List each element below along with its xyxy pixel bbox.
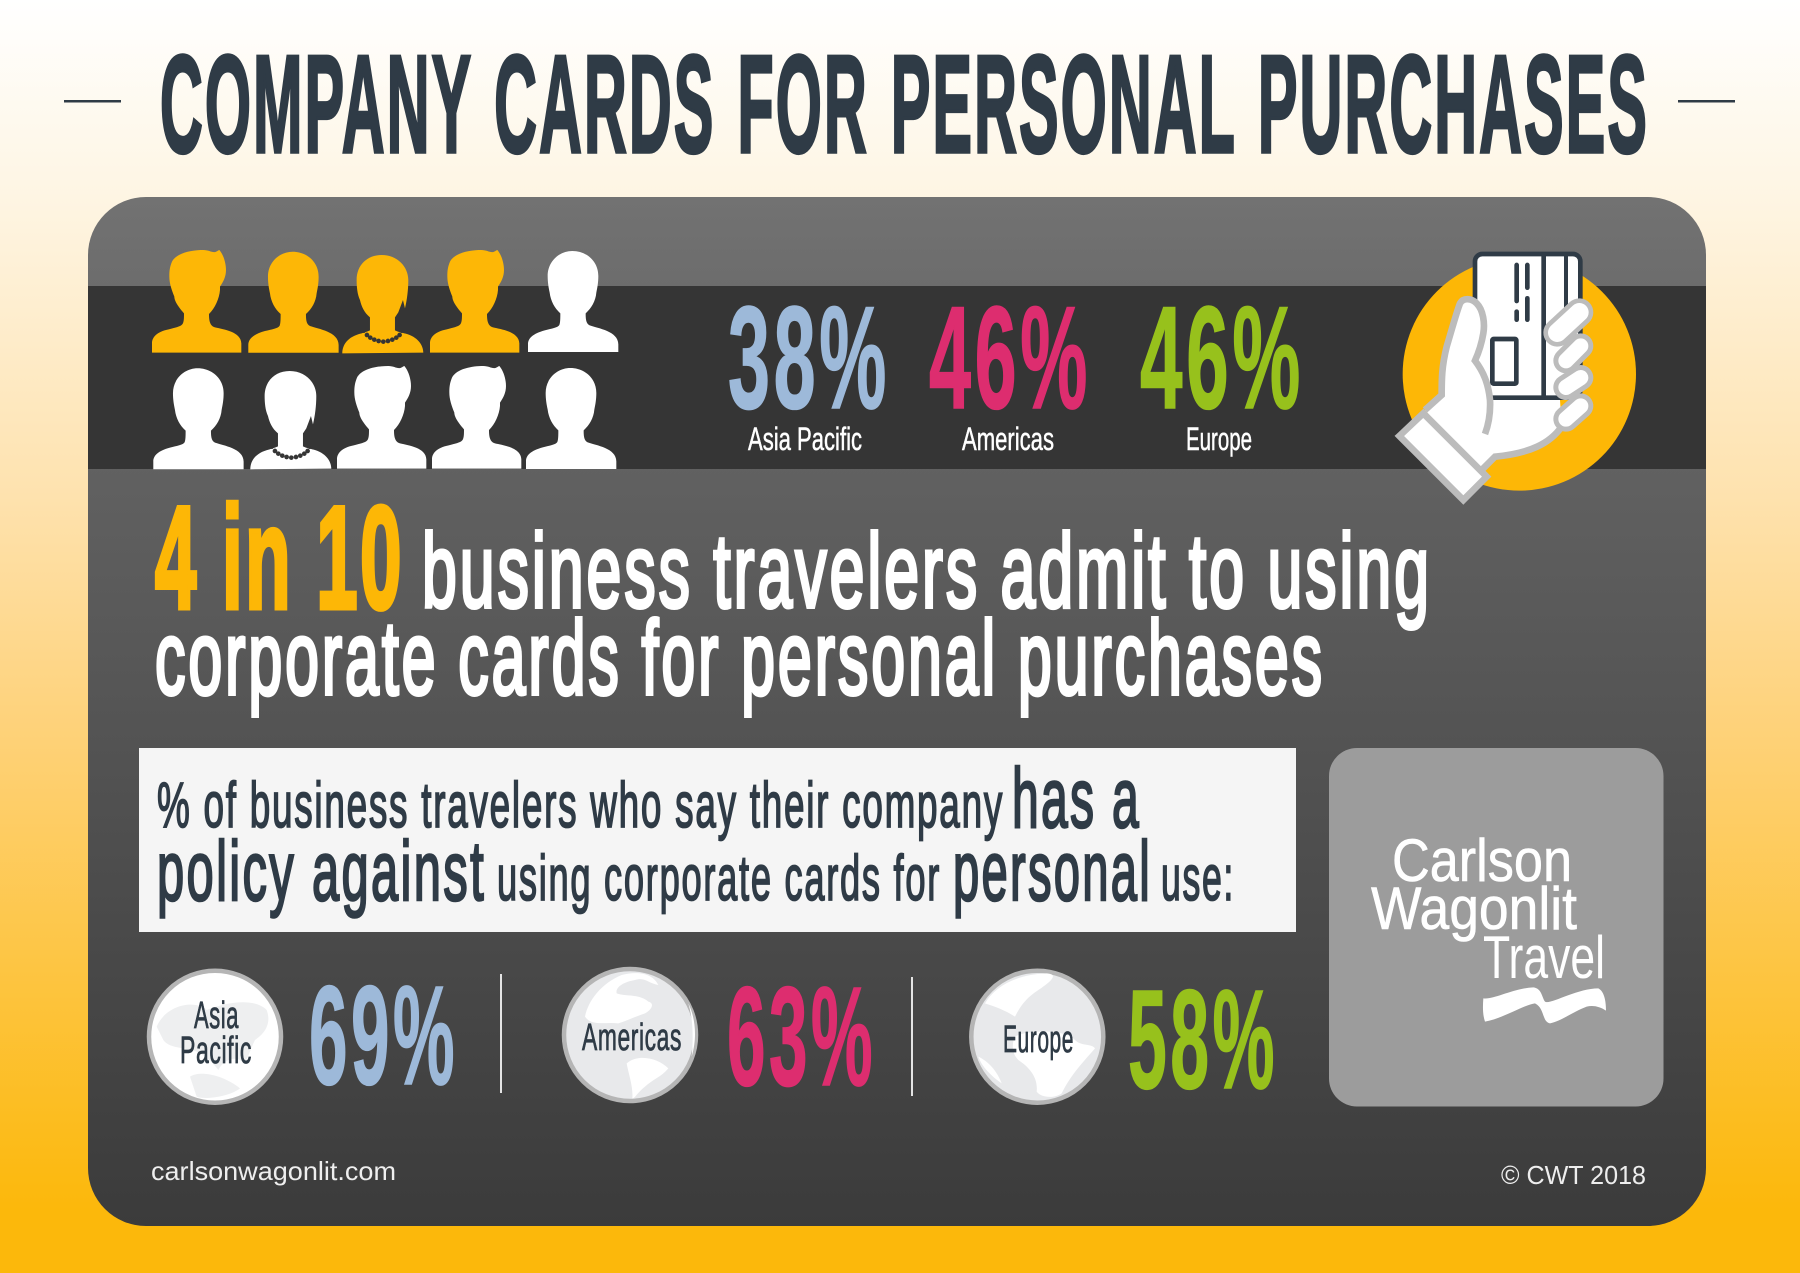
- text: 63%: [727, 957, 876, 1115]
- globe: Asia Pacific: Pacific: [180, 1030, 252, 1072]
- stat: Americas 46%: Americas: [962, 421, 1054, 457]
- person 1 orange: [152, 250, 241, 353]
- title dash right: [1678, 100, 1735, 102]
- policy statement box: % of business travelers who say their company: [157, 769, 1004, 841]
- person 4 orange: [430, 250, 519, 353]
- stat: Americas 46%: [929, 276, 1091, 457]
- policy statement box: has a: [1012, 751, 1141, 845]
- person 3 orange: [342, 255, 423, 353]
- logo panel: Wagonlit: [1371, 875, 1577, 942]
- globe: Asia Pacific: [149, 971, 281, 1103]
- text: 58%: [1128, 960, 1278, 1118]
- globe: Europe: Europe: [1003, 1019, 1074, 1061]
- policy statement box: using corporate cards for: [497, 842, 941, 914]
- highlight: 4 in 10: 4 in 10: [155, 476, 404, 639]
- stat: Asia Pacific 38%: Asia Pacific: [748, 421, 862, 457]
- globe: Europe: [971, 971, 1103, 1103]
- stat: Asia Pacific 38%: 38%: [728, 276, 890, 439]
- icon: hand holding credit card: [1399, 254, 1636, 500]
- text: 69%: [309, 956, 458, 1114]
- person 6 white: [153, 368, 244, 469]
- globe: Asia Pacific: Asia: [194, 995, 239, 1037]
- title dash left: [64, 100, 121, 102]
- sleeve cuff: [1399, 413, 1487, 500]
- footer: website: carlsonwagonlit.com: [151, 1156, 396, 1186]
- globe: Americas: Americas: [582, 1017, 682, 1059]
- policy statement box: [139, 748, 1296, 932]
- stat: Americas 46%: 46%: [929, 276, 1091, 439]
- stat: Europe 46%: [1140, 276, 1304, 457]
- headline: 4 in 10 business travelers: [155, 476, 1432, 717]
- person 2 orange: [248, 252, 339, 353]
- people icons: 4 in 10: [152, 250, 618, 469]
- policy statement box: personal: [953, 824, 1152, 918]
- person 7 white: [250, 371, 331, 469]
- divider: [911, 977, 913, 1096]
- person 5 white: [528, 251, 618, 352]
- hand palm and thumb: [1425, 299, 1562, 472]
- footer: copyright: © CWT 2018: [1501, 1160, 1646, 1190]
- policy statement box: policy against: [157, 824, 486, 918]
- logo wordmark: Carlson: [1392, 827, 1572, 894]
- person 8 white: [337, 366, 426, 469]
- person 10 white: [526, 368, 616, 469]
- logo wave: [1483, 987, 1606, 1023]
- stat: Europe 46%: 46%: [1140, 276, 1304, 439]
- logo panel: [1329, 748, 1664, 1106]
- globe: Americas: [564, 969, 696, 1101]
- person 9 white: [432, 366, 521, 469]
- logo panel: Travel: [1483, 924, 1605, 991]
- policy statement box: use:: [1161, 842, 1235, 914]
- fingers: [1557, 312, 1581, 419]
- dark band: [88, 286, 1706, 469]
- stat: Europe 46%: Europe: [1186, 421, 1252, 457]
- main panel: [88, 197, 1706, 1226]
- credit card: [1475, 254, 1580, 398]
- stat: Asia Pacific 38%: [728, 276, 890, 457]
- divider: [500, 974, 502, 1093]
